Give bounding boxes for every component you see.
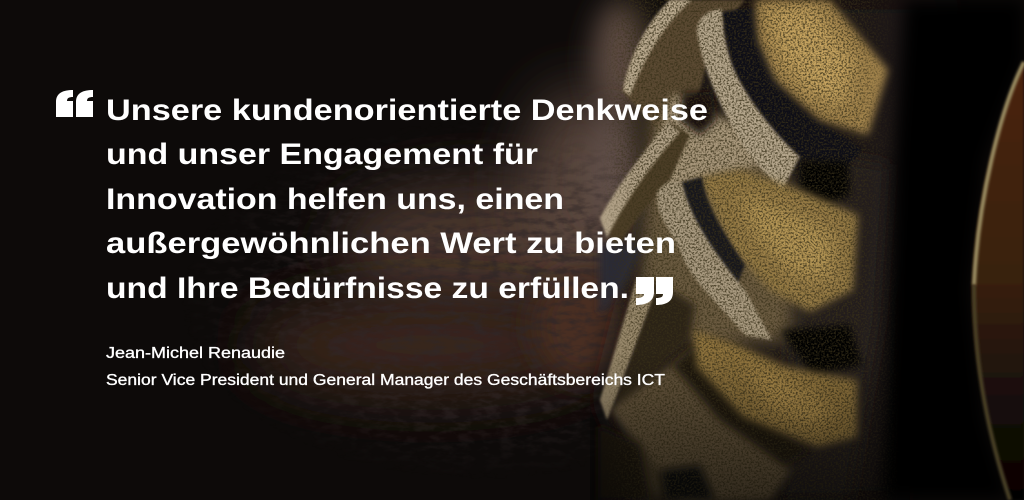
icon: closing quotation mark [636,277,673,305]
background: dark soil field [217,0,656,450]
quote text: Unsere kundenorientierte Denkweise [106,94,708,127]
quote text: und unser Engagement für [106,138,538,171]
attribution: Jean-Michel Renaudie [106,345,285,362]
icon: opening quotation mark [56,90,93,117]
quote text: außergewöhnlichen Wert zu bieten [106,227,676,260]
attribution [106,345,666,389]
tire: middle lug [600,122,858,340]
quote text: Innovation helfen uns, einen [106,183,564,216]
tire: dark rubber body [600,0,1024,500]
quote text [106,94,708,305]
tire: upper lug [623,0,888,200]
tire: lower lug [598,245,862,500]
attribution: Senior Vice President und General Manager des Geschäftsbereichs ICT [106,372,666,389]
tire: grain texture [600,0,900,500]
tire: bottom shading [590,0,910,500]
wheel rim at right edge [972,62,1024,500]
quote text: und Ihre Bedürfnisse zu erfüllen. [106,272,629,305]
